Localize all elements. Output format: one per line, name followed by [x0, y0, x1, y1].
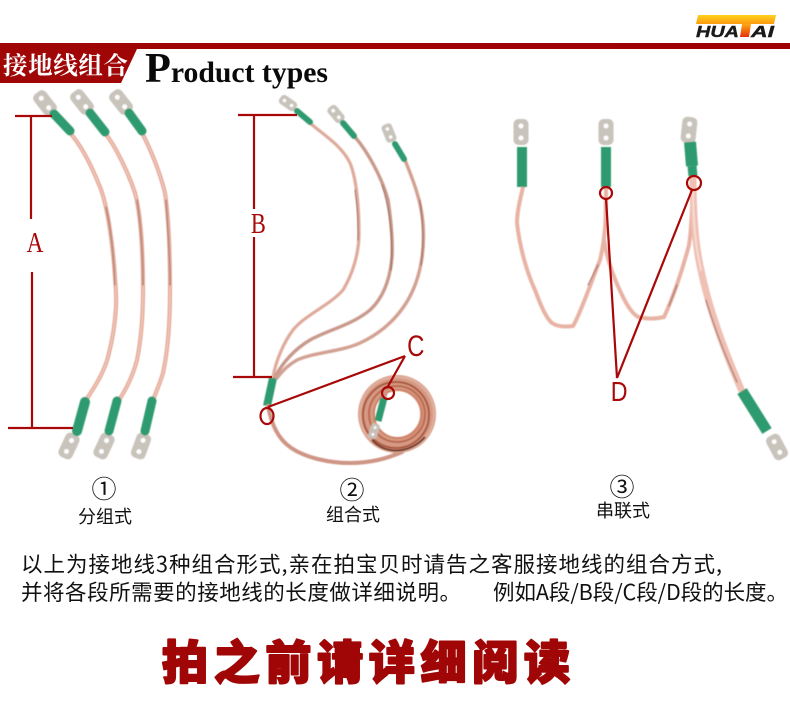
- product 1 label: [78, 476, 132, 527]
- product 3 label: [596, 474, 650, 521]
- dimension A: [8, 116, 73, 428]
- description paragraph: 以上为接地线3种组合形式,亲在拍宝贝时请告之客服接地线的组合方式,: [21, 548, 722, 579]
- description paragraph: 并将各段所需要的接地线的长度做详细说明。: [21, 576, 461, 607]
- letter D: D: [611, 377, 628, 408]
- dimension B: [233, 115, 297, 377]
- call to action title: 拍之前请详细阅读: [162, 627, 570, 693]
- product 2 label: ②: [339, 477, 365, 505]
- letter A: A: [27, 227, 43, 259]
- header bar with banner: [0, 43, 790, 83]
- description paragraph: [21, 548, 788, 607]
- marker C with pointers: [260, 328, 424, 424]
- marker D with pointers: [600, 176, 701, 408]
- label text: 分组式: [78, 507, 132, 527]
- logo: HUATAI: [696, 15, 776, 41]
- label text: 组合式: [326, 505, 380, 525]
- letter C: C: [407, 328, 424, 363]
- label text: 串联式: [596, 501, 650, 521]
- banner heading: 接地线组合: [3, 52, 128, 80]
- product 1 label: ①: [91, 476, 117, 504]
- product 2: combined cables: [267, 93, 434, 463]
- logo: HUATAI: AI: [750, 24, 775, 41]
- coil of cable: [360, 377, 434, 451]
- product 3 label: ③: [609, 474, 635, 502]
- heading: Product types: Product types: [145, 46, 328, 92]
- description paragraph: 例如A段/B段/C段/D段的长度。: [493, 576, 788, 607]
- product 3: series cables: [514, 116, 790, 462]
- product 1: separate cables: [31, 87, 170, 461]
- letter B: B: [251, 209, 266, 240]
- product 2 label: [326, 477, 380, 525]
- logo: HUATAI: HUA: [696, 24, 739, 41]
